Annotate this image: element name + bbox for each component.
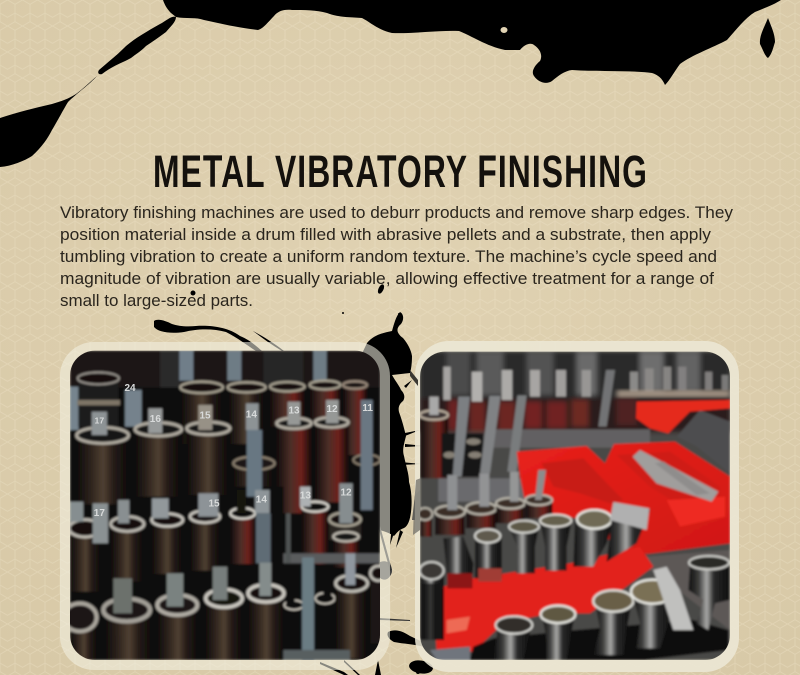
rails [283,553,380,563]
big red tray [517,442,730,554]
ink splash: top banner [163,0,781,85]
photo 1 socket size labels: 11 [362,403,373,414]
row 2 big sockets [78,443,126,506]
panel: photo 1 socket rack [60,342,390,670]
row 4 pins [113,578,132,613]
lower red tray [435,547,653,652]
row 3 sockets [71,538,100,594]
body text block [60,204,734,310]
pins row 2 [92,412,107,435]
grey rail [490,429,650,448]
ink splash: large blot between photos [340,312,425,580]
dark area [442,433,483,477]
body text block: Vibratory finishing machines are used to deburr products and remove sharp edges. They [60,204,734,222]
top-right grey box [677,410,730,473]
ink splash: upper-left of first photo [154,320,284,351]
photo 1 socket size labels: 14 [246,409,257,420]
photo 1 frame [60,342,390,670]
photo 1 socket size labels [94,383,373,519]
left tall red socket [420,415,448,478]
ink specks near text [190,283,400,315]
photo 1 socket size labels: 13 [300,490,311,501]
photo 2 image [418,352,730,660]
panel: photo 2 red tray sockets [415,341,739,672]
lower chrome sockets [494,632,530,660]
photo 1 socket size labels: 24 [124,383,136,394]
photo 1 socket size labels: 14 [256,494,267,505]
photo 2 frame [415,341,739,672]
ink splash: lower between photos [320,618,434,675]
photo 1 socket size labels: 12 [340,487,352,498]
top-right red [636,400,730,433]
body text block: position material inside a drum filled with abrasive pellets and a substrate, then apply [60,226,712,244]
upper pins [472,372,482,402]
lower right grey floor [647,550,730,630]
background rack, blurred [420,352,730,432]
photo 1 socket size labels: 13 [288,405,300,416]
rods [179,351,193,381]
photo 1 socket size labels: 15 [199,410,211,421]
mid-row sockets [435,512,465,535]
mid socket [234,470,272,489]
photo 1 socket size labels: 12 [326,404,338,415]
ink splash: drop top right [760,18,775,58]
chrome sockets on lower tray [420,567,444,640]
photo 1 socket size labels: 17 [95,415,104,425]
photo 1 socket size labels: 16 [150,414,161,425]
black base [470,620,728,660]
row 4 sockets [71,629,96,660]
photo 1 socket size labels: 17 [94,508,105,519]
body text block: magnitude of vibration are usually variable, allowing effective treatment for a range of [60,270,715,288]
grey cylinder in tray [633,450,718,502]
mid-row pins [447,475,457,510]
body text block: tumbling vibration to create a uniform random texture. The machine’s cycle speed and [60,248,717,266]
photo 1 socket size labels: 15 [208,499,220,510]
diagonal rods [453,397,470,477]
photo 1 image [63,351,386,661]
ink: thin grey strokes over right photo frame [410,370,421,535]
ink splash: diagonal streak left [0,17,176,167]
body text block: small to large-sized parts. [60,292,253,310]
back row sockets [78,386,119,426]
